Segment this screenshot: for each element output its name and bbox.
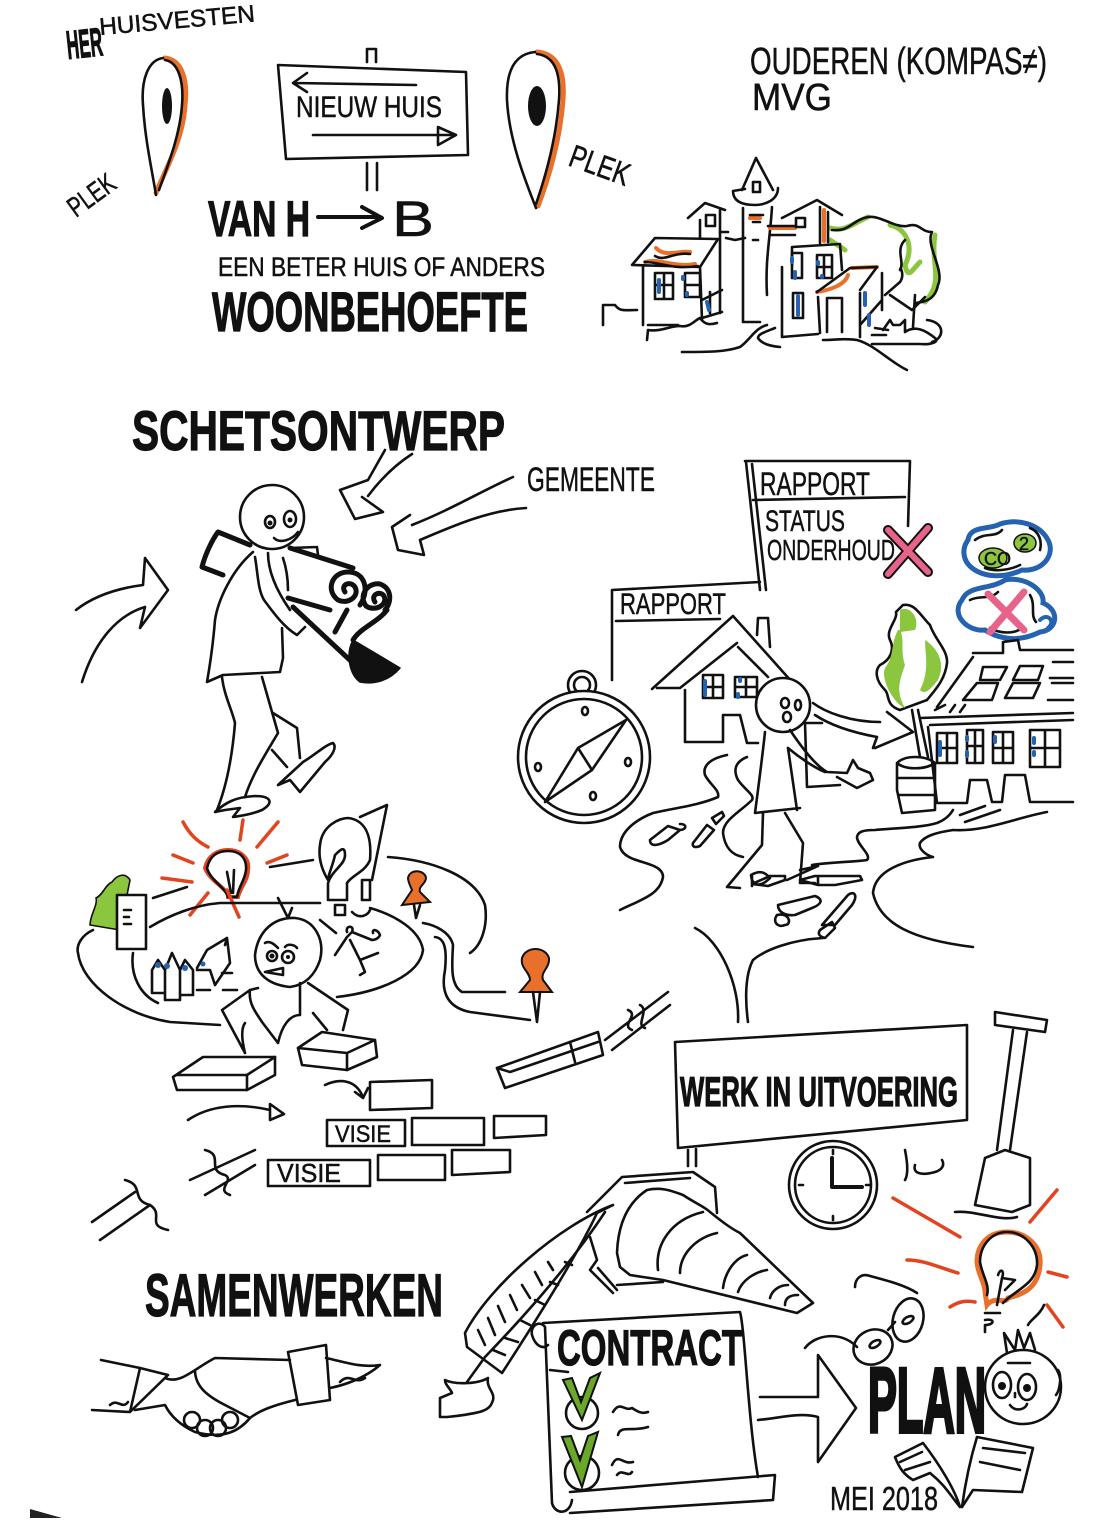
heading: samenwerken: SAMENWERKEN [145, 1262, 443, 1329]
heading: herhuisvesten: HER [64, 20, 105, 68]
sign: rapport status onderhoud [745, 461, 910, 590]
illustration: site plan circles [78, 857, 530, 1025]
icon: clock [789, 1141, 943, 1229]
icon: shovel [955, 1012, 1047, 1218]
section: werk in uitvoering [587, 1012, 1047, 1313]
illustration: open book [895, 1437, 1033, 1507]
section: plan [805, 1190, 1067, 1517]
icon: right map pin [507, 52, 563, 208]
icon: crossed cloud [958, 579, 1055, 639]
label: plek right: PLEK [565, 138, 635, 193]
text: date: MEI 2018 [830, 1480, 938, 1517]
figure: plan head [985, 1330, 1061, 1424]
sign: rapport status onderhoud: STATUS [765, 505, 845, 538]
icon: broken road lines [92, 1150, 255, 1240]
heading: woonbehoefte: WOONBEHOEFTE [212, 280, 528, 343]
figure: person carrying scroll [202, 485, 400, 817]
illustration: bricks and visie wall: VISIE [277, 1158, 341, 1188]
icon: left map pin [143, 58, 186, 195]
icon: co2 cloud: CO [984, 549, 1011, 569]
sign: rapport status onderhoud: RAPPORT [760, 466, 870, 502]
document: contract [532, 1312, 775, 1513]
illustration: glasses [805, 1275, 928, 1371]
section: plan: PLAN [868, 1350, 986, 1452]
illustration: care home buildings [603, 158, 941, 370]
text: een beter huis of anders: EEN BETER HUIS OF ANDERS [218, 252, 545, 282]
signpost: nieuw huis: NIEUW HUIS [296, 91, 442, 124]
illustration: handshake [92, 1345, 380, 1436]
heading: herhuisvesten: HUISVESTEN [98, 0, 256, 41]
arrow: short to wall [325, 1081, 368, 1098]
icon: co2 cloud [964, 522, 1050, 576]
arrow: contract to plan [758, 1355, 856, 1462]
label: gemeente: GEMEENTE [527, 461, 655, 499]
section: top housing need [61, 0, 1047, 370]
document: contract: CONTRACT [557, 1320, 742, 1376]
section: samenwerken [92, 1262, 443, 1436]
illustration: bricks and visie wall [173, 992, 670, 1188]
figure: walking person [727, 678, 913, 888]
illustration: tree in pot [877, 605, 947, 813]
label: plek left: PLEK [61, 167, 122, 223]
illustration: quill and ink [440, 1205, 613, 1417]
heading: schetsontwerp: SCHETSONTWERP [132, 399, 505, 462]
sign: werk in uitvoering [675, 1025, 967, 1166]
illustration: bricks and visie wall: VISIE [335, 1121, 391, 1148]
sign: rapport [612, 582, 760, 680]
arrow: from above [340, 450, 412, 519]
section: brainstorm and vision [78, 805, 670, 1240]
section: schetsontwerp [76, 399, 655, 817]
illustration: winding path with footprints [620, 755, 1047, 1022]
icon: co2 cloud: 2 [1019, 534, 1029, 554]
arrow: from gemeente [392, 477, 526, 555]
section: contract [440, 1205, 856, 1513]
text: mvg: MVG [752, 77, 832, 119]
section: rapport and site visit [518, 461, 1073, 1022]
sign: rapport status onderhoud: ONDERHOUD [767, 535, 895, 567]
heading: van a naar b: B [392, 191, 434, 247]
heading: herhuisvesten [64, 0, 256, 68]
signpost: nieuw huis [278, 49, 468, 190]
illustration: house [652, 616, 840, 787]
illustration: bulb with rays [153, 820, 313, 917]
arrow: from left [76, 558, 168, 682]
icon: red pin small [402, 871, 430, 918]
illustration: solar building [920, 640, 1073, 803]
figure: person at desk [222, 898, 348, 1053]
icon: cone [587, 1172, 813, 1313]
sign: rapport: RAPPORT [620, 588, 726, 621]
icon: compass [518, 671, 650, 823]
arrow: curved to wall [188, 1104, 284, 1120]
heading: van a naar b: VAN H [208, 191, 310, 247]
icon: red cross status [888, 528, 928, 574]
illustration: second bulb [319, 805, 387, 915]
illustration: plan bulb with rays [893, 1190, 1067, 1332]
icon: red pin large [520, 949, 552, 1022]
heading: van a naar b [208, 191, 434, 247]
